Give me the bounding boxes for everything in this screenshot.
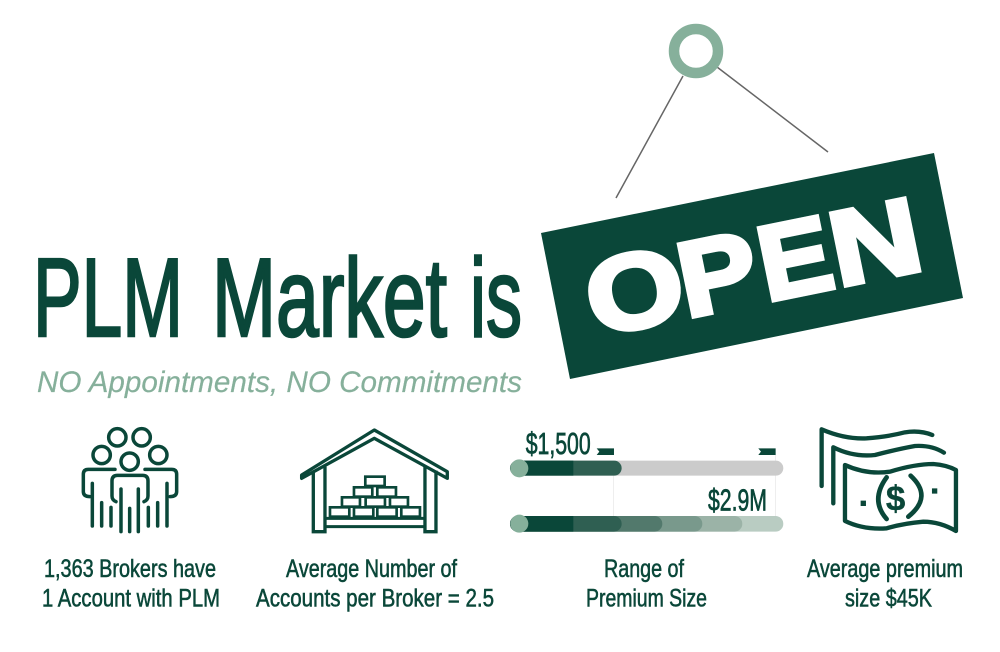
sign word: N: [819, 176, 931, 309]
label: average premium: size $45K: [845, 584, 932, 612]
label: average premium: [807, 555, 963, 612]
label: brokers: 1,363 Brokers have: [44, 555, 216, 583]
sign strings: [616, 67, 828, 198]
label: brokers: [42, 555, 220, 612]
label: brokers: 1 Account with PLM: [42, 584, 220, 612]
upper bar: [510, 459, 783, 477]
sign board: [541, 153, 963, 379]
label: range: Premium Size: [586, 584, 707, 612]
label: average premium: Average premium: [807, 555, 963, 583]
label: range: Range of: [604, 555, 684, 583]
label: accounts per broker: Average Number of: [286, 555, 457, 583]
label: accounts per broker: Accounts per Broker = 2.5: [256, 584, 494, 612]
value: low premium: $1,500: [526, 426, 591, 461]
label: accounts per broker: [256, 555, 494, 612]
icon: warehouse with bricks: [302, 430, 447, 532]
open sign: [541, 29, 963, 379]
lower bar: [510, 515, 783, 533]
sign word: E: [748, 194, 842, 324]
title: PLM: [33, 236, 183, 360]
icon: money bills: [822, 429, 956, 531]
label: range: [586, 555, 707, 612]
sign ring: [674, 29, 718, 73]
icon: group of brokers: [83, 429, 177, 532]
subtitle: NO Appointments, NO Commitments: [37, 366, 522, 399]
title: is: [470, 236, 522, 360]
value: high premium: $2.9M: [708, 482, 767, 518]
sign word: P: [668, 209, 767, 340]
dollar sign: $: [886, 480, 905, 519]
high marker flag: [758, 448, 776, 455]
chart: range of premium size: [510, 448, 783, 533]
title: Market: [212, 236, 447, 360]
sign word: O: [575, 224, 694, 359]
low marker flag: [597, 448, 614, 455]
bill dots: [861, 488, 937, 506]
